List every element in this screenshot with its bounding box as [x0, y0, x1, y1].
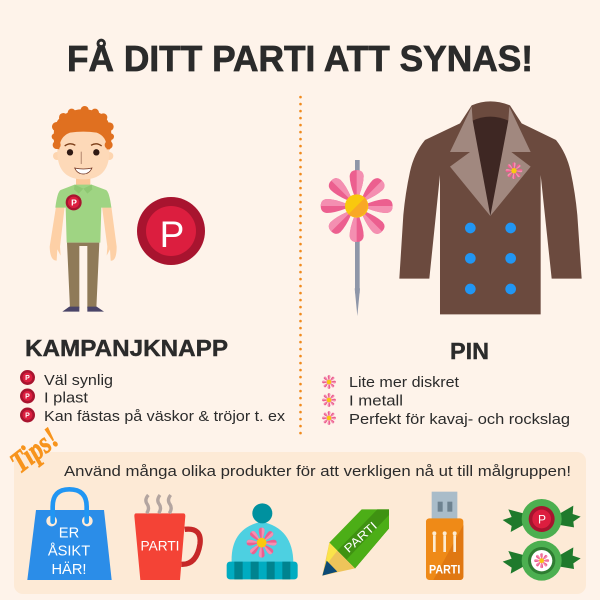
nose [79, 152, 83, 164]
illustration: person wearing campaign button [50, 106, 117, 312]
icon: beanie [227, 503, 298, 579]
icon: pencil: PARTI [341, 519, 380, 556]
icon: candy with button [503, 499, 581, 539]
badge on shirt [66, 194, 82, 210]
eyebrows [65, 144, 102, 146]
tips label: Tips! [4, 421, 65, 480]
hair [52, 106, 114, 149]
icon: candy with button: P [538, 512, 546, 526]
title: FÅ DITT PARTI ATT SYNAS! [67, 38, 533, 79]
icon: large campaign button: P [160, 214, 184, 255]
neck [76, 175, 90, 188]
heading: kampanjknapp: KAMPANJKNAPP [25, 335, 228, 361]
icon: usb stick [426, 492, 463, 580]
icon: tote bag: HÄR! [51, 561, 87, 578]
list: kampanjknapp: Väl synlig [44, 373, 113, 389]
icon: tote bag: ER [59, 525, 79, 541]
jacket body [399, 101, 582, 314]
icon: usb stick: PARTI [429, 563, 460, 576]
illustration: person wearing campaign button: P [71, 198, 77, 208]
list: pin: I metall [349, 394, 403, 410]
icon: mug: PARTI [141, 539, 179, 554]
lapel flower [506, 162, 522, 179]
list: pin: Lite mer diskret [349, 375, 459, 391]
list: kampanjknapp: I plast [44, 390, 88, 406]
icon: tote bag: ÅSIKT [48, 543, 90, 560]
list: pin: Perfekt för kavaj- och rockslag [349, 412, 570, 428]
heading: pin: PIN [450, 338, 489, 364]
icon: jacket [399, 101, 582, 314]
face [57, 130, 109, 179]
trousers [67, 243, 99, 308]
lining [473, 117, 508, 216]
buttons [465, 223, 516, 294]
shirt [55, 185, 111, 243]
icon: large campaign button [137, 197, 205, 265]
list: kampanjknapp: Kan fästas på väskor & tröjor t. ex [44, 409, 286, 425]
icon: candy with flower [503, 541, 581, 581]
icon: flower pin [321, 160, 393, 316]
icon: mug [134, 495, 200, 580]
list: pin [322, 375, 570, 428]
divider [299, 97, 302, 437]
tips text: Använd många olika produkter för att verkligen nå ut till målgruppen! [64, 463, 571, 480]
icon: pencil [322, 509, 389, 576]
mouth [75, 168, 92, 174]
list: kampanjknapp [20, 370, 286, 425]
icon: tote bag [27, 489, 112, 580]
panel: tips [14, 452, 586, 594]
collar [74, 185, 92, 194]
arms [50, 207, 117, 261]
ears [53, 152, 61, 160]
eyes [67, 149, 73, 155]
shoes [62, 307, 104, 312]
lapels [450, 107, 490, 216]
